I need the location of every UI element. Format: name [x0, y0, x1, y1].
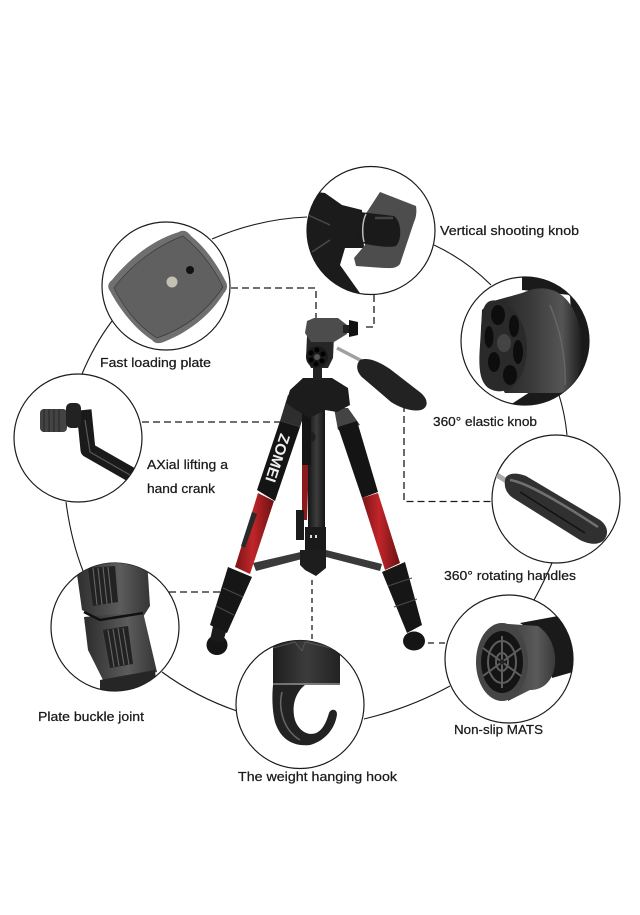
right leg: [334, 408, 425, 650]
panel: 360 rotating handles: [492, 435, 620, 563]
label: weight hanging hook: The weight hanging hook: [238, 769, 398, 784]
label: axial lifting hand crank: AXial lifting a: [147, 457, 229, 472]
left leg: [206, 395, 306, 655]
icon: buckle joint: [77, 563, 157, 691]
panel: vertical shooting knob: [300, 166, 435, 296]
label: plate buckle joint: Plate buckle joint: [38, 709, 144, 724]
pan handle: [337, 348, 427, 411]
panel: 360 elastic knob: [461, 277, 590, 405]
dashed leader lines: [142, 288, 491, 643]
label: non-slip mats: Non-slip MATS: [454, 722, 543, 737]
rear leg and braces: [253, 460, 382, 571]
icon: vertical knob: [308, 192, 416, 293]
tripod head: [305, 318, 358, 380]
panel: non-slip mats: [445, 595, 575, 723]
icon: handle grip: [497, 474, 607, 544]
label: 360 rotating handles: 360° rotating handles: [444, 568, 577, 583]
center column: [296, 410, 326, 576]
panel: fast loading plate: [102, 222, 230, 350]
icon: hook: [272, 640, 340, 745]
panel: weight hanging hook: [236, 640, 364, 768]
icon: elastic knob: [479, 277, 590, 405]
connecting ring arcs: [66, 217, 567, 719]
panel: axial lifting hand crank: [14, 374, 142, 502]
label: 360 elastic knob: 360° elastic knob: [433, 414, 537, 429]
zomei logo: ZOMEI: [261, 431, 293, 484]
icon: crank: [40, 403, 137, 478]
label: axial lifting hand crank: [147, 457, 229, 496]
tripod: [206, 318, 427, 655]
icon: rubber foot: [476, 616, 575, 701]
panel: plate buckle joint: [51, 560, 179, 700]
label: axial lifting hand crank: hand crank: [147, 481, 216, 496]
label: fast loading plate: Fast loading plate: [100, 355, 211, 370]
label: vertical shooting knob: Vertical shooting knob: [440, 223, 579, 238]
icon: quick release plate: [108, 231, 227, 343]
spider hub: [286, 378, 350, 418]
